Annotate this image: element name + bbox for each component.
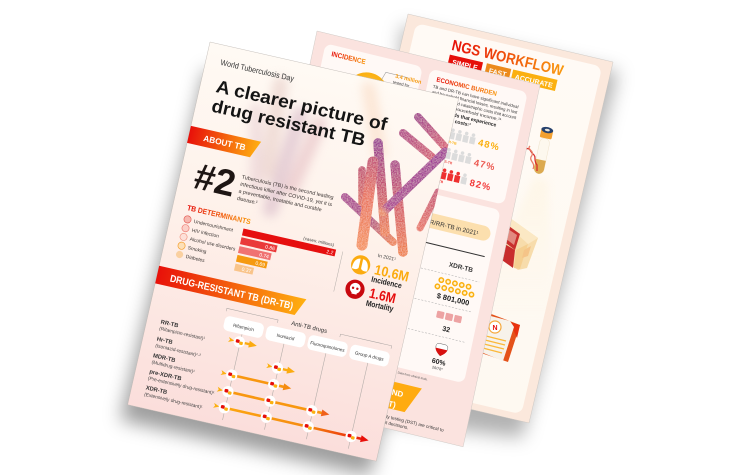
label: MDR-TB xyxy=(151,353,197,375)
label: Hr-TB: Hr-TB xyxy=(156,337,173,346)
text: burden paragraph: for 20% of household income.¹¹ xyxy=(429,100,503,122)
guide lines xyxy=(223,333,368,449)
bracket: anti-TB drugs: Anti-TB drugs xyxy=(291,321,328,335)
page background xyxy=(128,42,459,461)
pill: header xyxy=(341,192,492,242)
chart: determinants bars: (cases: millions) xyxy=(303,236,335,248)
drug pills xyxy=(223,315,391,367)
callout: tested: tested for xyxy=(393,79,410,88)
drug pills: Isoniazid xyxy=(276,333,295,342)
chart: determinants bars: 0.69 xyxy=(255,261,266,269)
text: event label: World Tuberculosis Day xyxy=(220,58,295,83)
card: XDR-TB comparison: 26/78* xyxy=(432,365,444,372)
chart: people row 48%: RR-TB xyxy=(446,139,457,146)
icon: smoking: Smoking xyxy=(187,245,207,255)
text: households label: catastrophic costs:¹ xyxy=(424,112,472,129)
banner: about TB xyxy=(187,126,261,159)
banner: testing: TESTING AND xyxy=(350,378,404,399)
chart: determinants bars xyxy=(234,222,338,292)
drug pills: Group A drugs xyxy=(355,350,385,362)
chart: people row 82% xyxy=(412,161,492,195)
arrow: MDR-TB xyxy=(220,367,292,394)
label: Hr-TB xyxy=(155,337,203,359)
label: MDR-TB: MDR-TB xyxy=(152,353,176,364)
callout: tested: 3.4 million xyxy=(395,74,423,86)
arrow: XDR-TB xyxy=(212,400,370,446)
panel: front page xyxy=(128,42,459,461)
title: drug resistant TB xyxy=(210,96,367,150)
table rule xyxy=(338,221,485,257)
arrow: RR-TB xyxy=(227,334,258,351)
heading: economic burden: ECONOMIC BURDEN xyxy=(436,76,498,98)
chart: people row 82%: XDR-TB xyxy=(430,177,444,184)
label: XDR-TB: XDR-TB xyxy=(145,385,168,396)
banner: drug-resistant TB: DRUG-RESISTANT TB (DR-TB) xyxy=(169,274,294,312)
icon: heart xyxy=(434,343,448,357)
text: cost: $ 801,000 xyxy=(436,291,470,308)
icon: report folder xyxy=(476,312,520,362)
row labels xyxy=(144,320,228,413)
text: TB description xyxy=(236,174,335,223)
text: column head: XDR-TB xyxy=(448,262,474,274)
stat: #2: #2 xyxy=(191,155,240,205)
blurred bacteria backdrop xyxy=(235,65,393,230)
inner card xyxy=(335,23,602,414)
text: TB description: disease.¹ xyxy=(236,196,258,206)
stat: incidence: 10.6M xyxy=(373,261,411,285)
icon: sample tube xyxy=(532,126,554,175)
panel: back page NGS workflow xyxy=(324,14,613,423)
icon: diabetes: Diabetes xyxy=(185,254,206,264)
label: Hr-TB: (Isoniazid-resistant)¹·² xyxy=(155,343,202,359)
icon: HIV: HIV infection xyxy=(191,228,220,240)
label: XDR-TB: (Extensively drug-resistant)¹ xyxy=(144,392,203,411)
text: in 2021: In 2021¹ xyxy=(377,253,397,263)
tag: simple: SIMPLE xyxy=(451,59,479,72)
page background xyxy=(324,14,613,423)
chart: determinants bars: 0.86 xyxy=(265,244,276,252)
chart: determinants bars: 0.37 xyxy=(241,267,252,275)
heading: incidence: INCIDENCE xyxy=(331,51,366,66)
label: RR-TB xyxy=(159,320,207,342)
icon: DNA helix xyxy=(525,146,537,171)
divider xyxy=(334,252,343,292)
chart: people row 48%: 48% xyxy=(477,138,500,153)
text: TB description: infectious killer after COVID-19, yet it is xyxy=(240,182,333,208)
chart: people row 47%: 47% xyxy=(473,158,496,173)
text: households label: Households that experience xyxy=(431,107,497,129)
label: XDR-TB xyxy=(144,385,205,411)
text: households label xyxy=(424,106,497,135)
text: burden paragraph: TB and DR-TB can have significant individual xyxy=(432,84,519,109)
chart: people row 48% xyxy=(420,123,500,156)
arrow: Hr-TB xyxy=(265,360,296,377)
text: burden paragraph: productivity, and catastrophic costs that account xyxy=(430,95,518,120)
title xyxy=(210,76,390,154)
page background xyxy=(240,31,540,447)
banner: testing xyxy=(254,349,422,415)
tag: simple xyxy=(447,55,483,74)
stat: mortality xyxy=(365,284,398,314)
text: footnote: Data from clinical trials. xyxy=(397,370,428,382)
text: burden paragraph: and household financial losses, resulting in lost xyxy=(431,89,519,115)
label: pre-XDR-TB: (Pre-extensively drug-resistant)¹ xyxy=(147,376,215,397)
label: RR-TB: RR-TB xyxy=(160,320,179,329)
stat: mortality: Mortality xyxy=(365,299,395,314)
icon: skull xyxy=(344,278,366,301)
illustration: TB bacteria xyxy=(345,117,445,252)
card: economic burden xyxy=(407,69,528,205)
card: incidence xyxy=(301,43,425,181)
text: testing note: Drug susceptibility testing (DST) are critical to xyxy=(353,406,445,433)
text: header label: MDR/RR-TB in 2021¹ xyxy=(419,217,479,237)
text: weeks: 32 xyxy=(442,326,451,334)
banner: about TB: ABOUT TB xyxy=(202,133,247,152)
tag: fast: FAST xyxy=(488,68,508,79)
icon: beds xyxy=(436,311,462,323)
icon: light beam xyxy=(470,178,552,325)
chart: people row 47%: DS-TB xyxy=(442,159,453,166)
icon: sequencer box xyxy=(499,218,538,270)
tag: accurate xyxy=(511,69,558,91)
drug pills: Fluoroquinolones xyxy=(310,340,346,353)
panel: middle page burden xyxy=(240,31,540,447)
callout: tested xyxy=(379,70,423,96)
text: TB description: a preventable, treatable and curable xyxy=(238,189,322,213)
stat: mortality: 1.6M xyxy=(368,285,398,306)
stat: incidence xyxy=(370,261,411,291)
tag: accurate: ACCURATE xyxy=(514,74,554,90)
text: TB description: Tuberculosis (TB) is the second leading xyxy=(241,174,334,201)
heading: NGS workflow: NGS WORKFLOW xyxy=(450,37,566,80)
arrow: pre-XDR-TB xyxy=(216,384,331,420)
text: testing note: guide treatment decisions. xyxy=(356,413,409,430)
label: pre-XDR-TB: pre-XDR-TB xyxy=(149,369,182,382)
bracket: anti-TB drugs xyxy=(226,306,392,350)
chart: incidence arc xyxy=(341,68,393,121)
text: success rate: 60% xyxy=(431,358,447,368)
chart: determinants bars: 0.74 xyxy=(259,252,270,260)
chart: people row 47% xyxy=(416,143,496,175)
banner: testing: (DST) xyxy=(374,396,397,410)
callout: tested: tuberculosis xyxy=(392,84,413,94)
icon: undernourishment: Undernourishment xyxy=(193,219,234,234)
icon: coins xyxy=(435,277,476,297)
chart: determinants bars: 2.2 xyxy=(326,249,334,256)
stat: incidence: Incidence xyxy=(370,275,403,290)
icon: alcohol: Alcohol use disorders xyxy=(189,236,236,253)
tag: fast xyxy=(484,63,511,80)
shadow: page stack xyxy=(120,26,618,475)
card: XDR-TB comparison xyxy=(264,162,501,383)
label: RR-TB: (Rifampicin-resistant)¹ xyxy=(159,326,206,342)
icon: lungs xyxy=(349,253,372,276)
title: A clearer picture of xyxy=(214,76,390,135)
list: determinants xyxy=(175,215,241,270)
label: MDR-TB: (Multidrug-resistant)¹ xyxy=(151,360,196,375)
icon: report folder: N xyxy=(492,325,498,332)
heading: TB determinants: TB DETERMINANTS xyxy=(186,203,252,226)
chart: people row 82%: 82% xyxy=(468,178,492,194)
text: burden paragraph xyxy=(429,84,520,126)
drug pills: Rifampicin xyxy=(233,323,255,332)
